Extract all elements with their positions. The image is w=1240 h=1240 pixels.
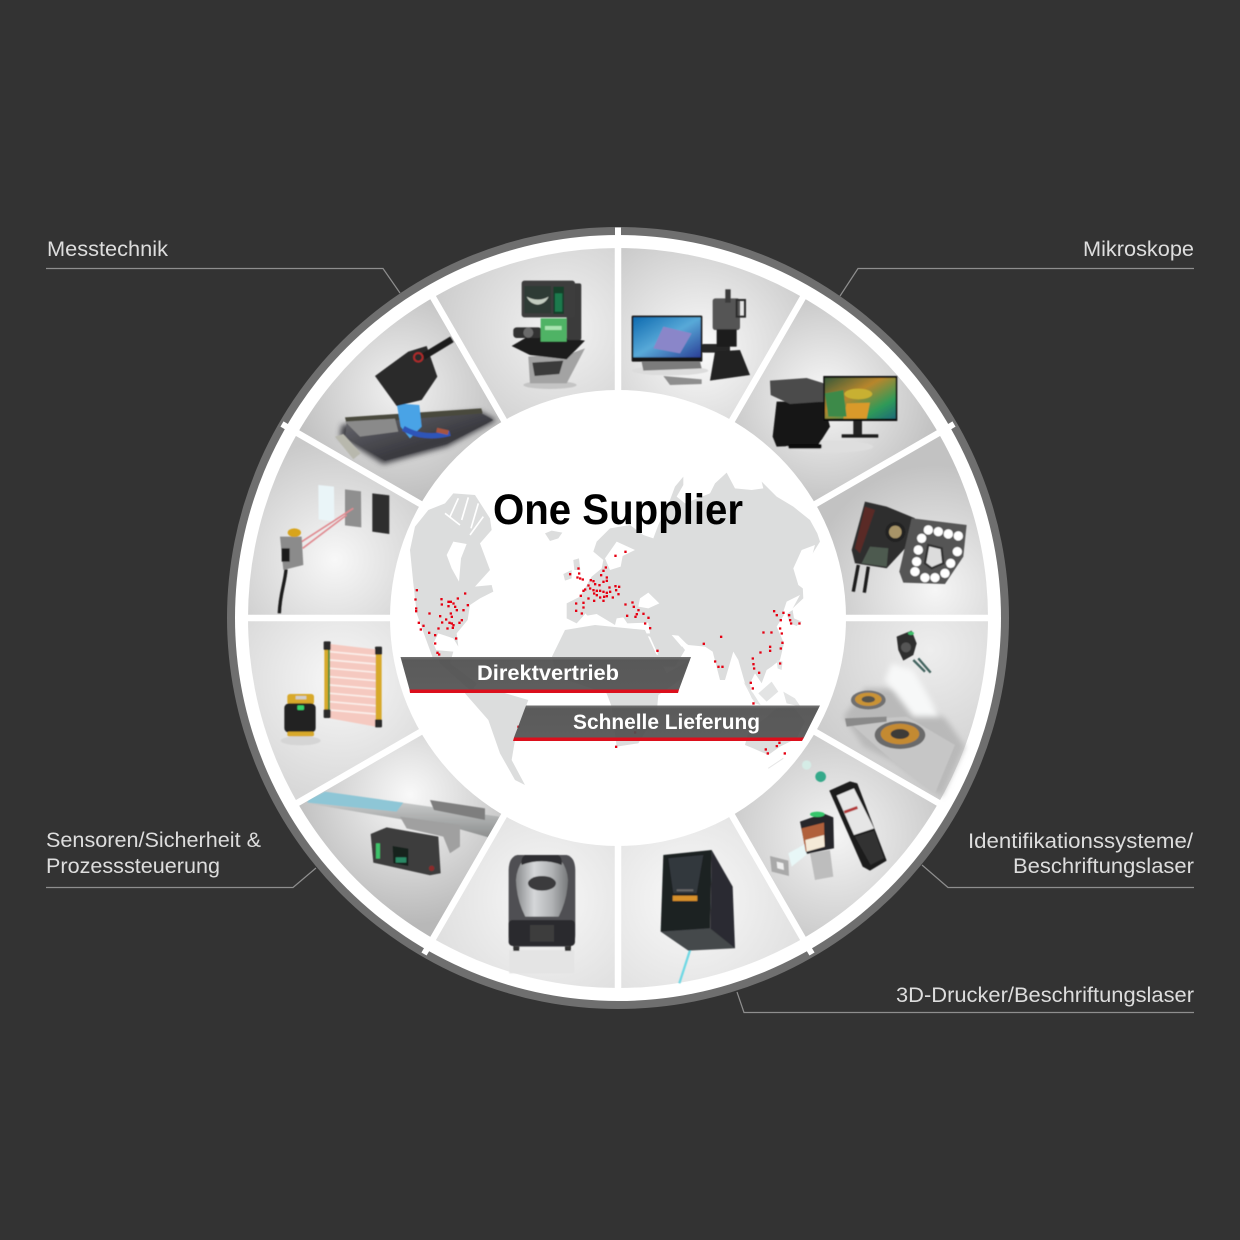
- product: laser scanning microscope with monitor: [770, 376, 897, 453]
- land south: Africa, South America, Australia: [435, 625, 805, 785]
- product: safety light curtain and scanner: [281, 641, 382, 745]
- callout: Mikroskope: [840, 238, 1194, 296]
- callout: Identifikationssysteme/Beschriftungslaser: Beschriftungslaser: [1013, 855, 1194, 878]
- product: pipe-mounted flow sensor: [307, 792, 499, 875]
- callout: Messtechnik: [46, 238, 400, 293]
- banner: Direktvertrieb: Direktvertrieb: [477, 662, 619, 685]
- banner: Schnelle Lieferung: Schnelle Lieferung: [573, 711, 760, 734]
- product: code reader and handheld terminal: [770, 760, 887, 880]
- product wheel: [227, 227, 1009, 1009]
- callout: Identifikationssysteme/Beschriftungslaser: Identifikationssysteme/: [968, 830, 1193, 853]
- product: inspection sensor over ring part fixtures: [843, 631, 965, 797]
- product: laser sensor with target plates: [279, 485, 389, 613]
- callout: 3D-Drucker/Beschriftungslaser: [737, 984, 1194, 1012]
- product: blue-light 3D scanner head: [335, 339, 497, 464]
- sales office dots: [415, 551, 800, 754]
- product: digital microscope with monitor: [632, 289, 750, 385]
- land east: Eurasia: [567, 473, 820, 700]
- callout: Mikroskope: Mikroskope: [1083, 238, 1194, 261]
- wedge backgrounds: [248, 248, 988, 988]
- land west: North America and western Europe: [410, 493, 580, 659]
- wedge dividers: [236, 236, 1000, 1000]
- banner: Direktvertrieb: [400, 657, 691, 693]
- title: One Supplier: [493, 486, 743, 534]
- product: vision camera and ring light: [852, 502, 967, 593]
- product: multi-sensor measuring machine: [512, 281, 585, 389]
- callout: Sensoren/Sicherheit & Prozesssteuerung: [46, 829, 316, 888]
- callout: Sensoren/Sicherheit & Prozesssteuerung: Prozesssteuerung: [46, 855, 220, 878]
- callout: Sensoren/Sicherheit & Prozesssteuerung: Sensoren/Sicherheit &: [46, 829, 261, 852]
- callout: Messtechnik: Messtechnik: [47, 238, 169, 261]
- outer ring: [227, 227, 1009, 1009]
- callout: Identifikationssysteme/Beschriftungslaser: [922, 830, 1194, 888]
- world map: [410, 473, 820, 785]
- callout: 3D-Drucker/Beschriftungslaser: 3D-Drucker/Beschriftungslaser: [896, 984, 1194, 1007]
- product: 3D printer: [509, 855, 575, 973]
- centre disc: [390, 390, 846, 846]
- product: 3D laser marker box: [661, 850, 735, 983]
- banner: Schnelle Lieferung: [513, 706, 820, 741]
